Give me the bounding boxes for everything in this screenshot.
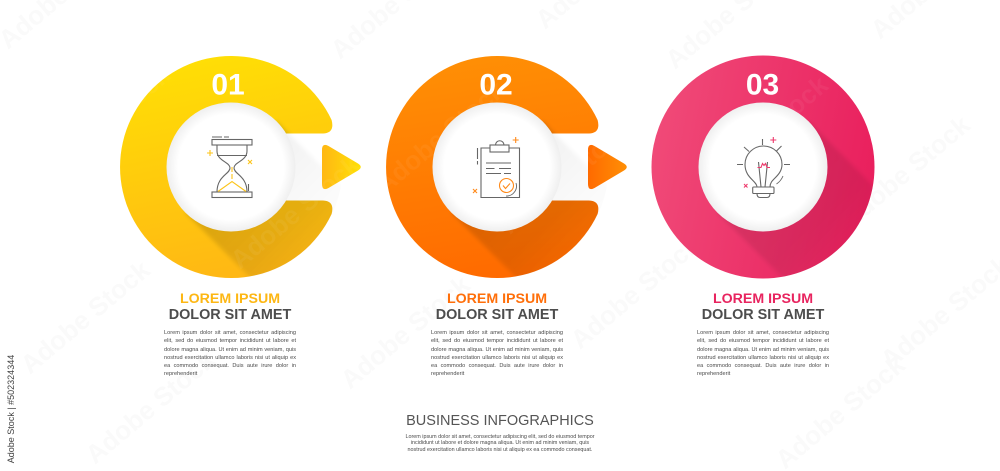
column 2 text xyxy=(431,291,563,377)
step 1 number: 01 xyxy=(211,68,245,102)
watermark on rings xyxy=(35,59,834,275)
footer description: Lorem ipsum dolor sit amet, consectetur adipiscing elit, sed do eiusmod tempor xyxy=(405,434,595,440)
column 2 heading line 2: DOLOR SIT AMET xyxy=(436,307,558,323)
step 3 pink circle xyxy=(652,56,874,278)
footer description: nostrud exercitation ullamco laboris nisi ut aliquip ex ea commodo consequat. xyxy=(408,447,592,453)
footer description: incididunt ut labore et dolore magna aliqua. Ut enim ad minim veniam, quis xyxy=(411,440,589,446)
column 3 text xyxy=(697,291,829,377)
column 1 body text: elit, sed do eiusmod tempor incididunt ut labore et xyxy=(164,338,296,344)
watermark on background: Adobe Stock xyxy=(335,269,476,395)
watermark on background: Adobe Stock xyxy=(15,254,156,380)
footer description xyxy=(405,434,595,453)
watermark on rings: Adobe Stock xyxy=(35,59,176,185)
column 3 body text: reprehenderit xyxy=(697,371,730,377)
icon: hourglass xyxy=(207,137,252,198)
column 1 body text: reprehenderit xyxy=(164,371,197,377)
infographic artwork xyxy=(120,56,874,278)
step 1 yellow ring xyxy=(120,56,332,278)
side stock caption: Adobe Stock | #502324344 xyxy=(6,355,16,463)
column 1 heading line 1: LOREM IPSUM xyxy=(180,291,280,307)
watermark on background: Adobe Stock xyxy=(770,349,911,471)
column 3 body text: Lorem ipsum dolor sit amet, consectetur adipiscing xyxy=(697,330,829,336)
column 3 body text: ea commodo consequat. Duis aute irure dolor in xyxy=(697,363,829,369)
arrow 1 xyxy=(322,145,361,189)
footer text block xyxy=(405,413,595,453)
watermark on rings: Adobe Stock xyxy=(495,114,636,240)
column 2 body text: Lorem ipsum dolor sit amet, consectetur adipiscing xyxy=(431,330,563,336)
watermark on rings: Adobe Stock xyxy=(370,74,511,200)
watermark on background: Adobe Stock xyxy=(835,109,976,235)
column 3 body text xyxy=(697,330,829,377)
column 3 body text: dolore magna aliqua. Ut enim ad minim veniam, quis xyxy=(697,346,829,352)
column 1 body text: nostrud exercitation ullamco laboris nisi ut aliquip ex xyxy=(164,355,296,361)
column 2 body text xyxy=(431,330,563,377)
watermark on rings: Adobe Stock xyxy=(693,69,834,195)
step 3 number: 03 xyxy=(746,68,779,102)
column 3 heading line 2: DOLOR SIT AMET xyxy=(702,307,824,323)
step 2 orange ring xyxy=(386,56,598,278)
column 3 body text: elit, sed do eiusmod tempor incididunt ut labore et xyxy=(697,338,829,344)
column 2 body text: ea commodo consequat. Duis aute irure dolor in xyxy=(431,363,563,369)
watermark on rings: Adobe Stock xyxy=(225,149,366,275)
column 3 body text: nostrud exercitation ullamco laboris nisi ut aliquip ex xyxy=(697,355,829,361)
column 2 body text: elit, sed do eiusmod tempor incididunt ut labore et xyxy=(431,338,563,344)
icon: clipboard xyxy=(473,137,520,198)
column 1 text xyxy=(164,291,296,377)
column 2 body text: reprehenderit xyxy=(431,371,464,377)
column 3 heading line 1: LOREM IPSUM xyxy=(713,291,813,307)
column 1 heading line 2: DOLOR SIT AMET xyxy=(169,307,291,323)
arrow 2 xyxy=(588,145,627,189)
column 2 heading line 1: LOREM IPSUM xyxy=(447,291,547,307)
watermark on background: Adobe Stock xyxy=(565,229,706,355)
column 2 body text: nostrud exercitation ullamco laboris nisi ut aliquip ex xyxy=(431,355,563,361)
step 2 number: 02 xyxy=(479,68,513,102)
watermark on background: Adobe Stock xyxy=(80,344,221,470)
footer title: BUSINESS INFOGRAPHICS xyxy=(406,413,594,429)
column 1 body text xyxy=(164,330,296,377)
column 1 body text: dolore magna aliqua. Ut enim ad minim veniam, quis xyxy=(164,346,296,352)
icon: light bulb xyxy=(737,137,790,198)
column 2 body text: dolore magna aliqua. Ut enim ad minim veniam, quis xyxy=(431,346,563,352)
column 1 body text: ea commodo consequat. Duis aute irure dolor in xyxy=(164,363,296,369)
column 1 body text: Lorem ipsum dolor sit amet, consectetur adipiscing xyxy=(164,330,296,336)
